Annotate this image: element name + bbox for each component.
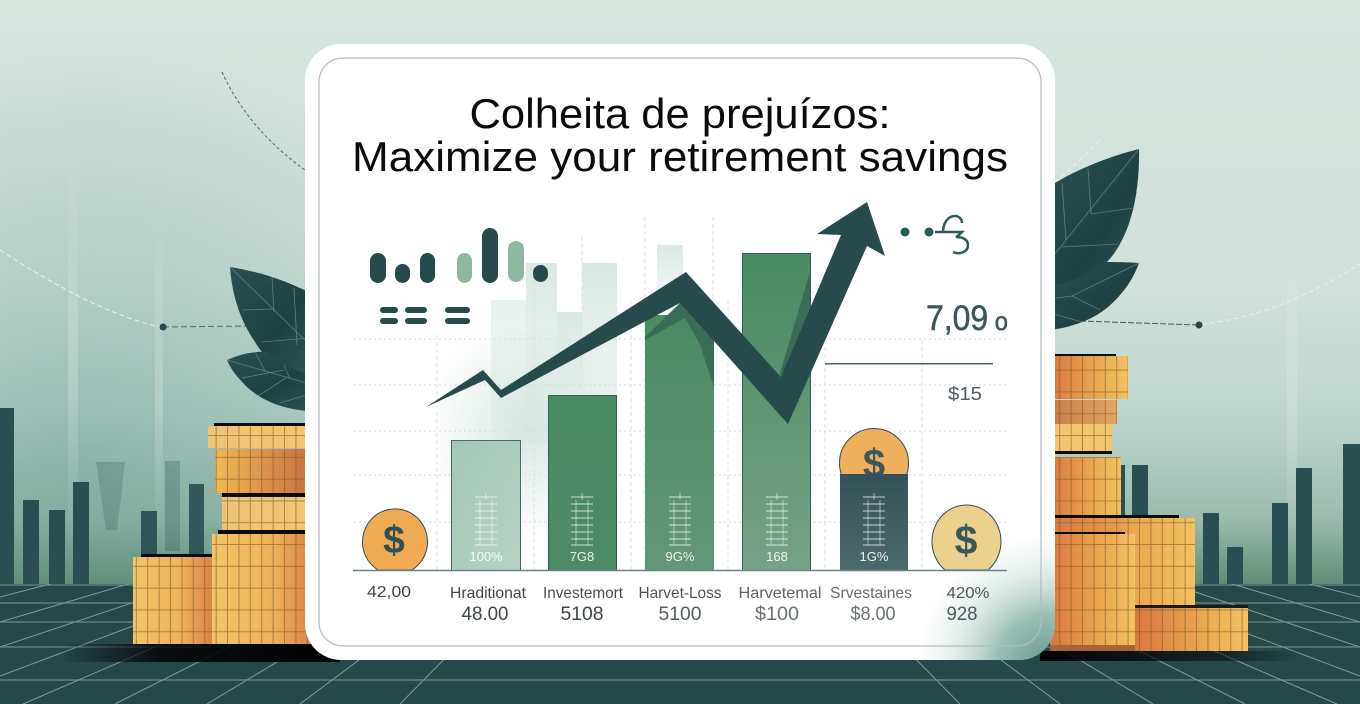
dashed connector lines	[0, 72, 1360, 327]
coin right: $	[955, 517, 978, 563]
category labels	[367, 584, 990, 602]
value labels: 5108	[560, 604, 604, 625]
bar value labels: 1G%	[860, 549, 889, 564]
shadows under coin stacks	[60, 644, 1300, 662]
category labels: Hraditionat	[450, 585, 527, 602]
bar value labels	[469, 493, 889, 564]
coin stack left	[133, 423, 312, 644]
coin left	[362, 509, 428, 570]
value labels	[462, 604, 978, 625]
category labels: Harvetemal	[738, 585, 822, 602]
chart	[353, 202, 1007, 625]
mini pill chart	[370, 228, 548, 283]
mini legend dashes	[380, 307, 470, 324]
value labels: $100	[755, 604, 799, 625]
side divider	[825, 363, 993, 364]
bar: dark savings	[840, 474, 908, 570]
card panel	[305, 44, 1055, 660]
category labels: Investemort	[543, 585, 624, 602]
connector node right	[1196, 322, 1202, 328]
bar: harvest total	[742, 254, 810, 570]
coin behind dark bar	[839, 428, 909, 474]
background skyline bars right	[1120, 444, 1360, 584]
value labels: $8.00	[850, 604, 896, 625]
value labels: 48.00	[462, 604, 508, 625]
category labels: 42,00	[367, 584, 411, 601]
floor grid	[0, 584, 1360, 704]
coin left: $	[383, 519, 405, 562]
background skyline bars left	[0, 408, 204, 584]
leaves right	[1050, 149, 1139, 330]
bar value labels: 9G%	[666, 549, 695, 564]
category labels: 420%	[946, 585, 990, 602]
value labels: 5100	[658, 604, 702, 625]
leaves left	[227, 267, 310, 411]
baseline	[353, 570, 1007, 572]
title: Maximize your retirement savings	[352, 133, 1008, 180]
bar: harvest-loss	[645, 315, 714, 570]
connector node left	[160, 324, 166, 330]
coin stack right	[1050, 354, 1248, 651]
bar value labels: 100%	[469, 549, 503, 564]
value labels: 928	[946, 604, 978, 625]
bar value labels: 7G8	[570, 549, 594, 564]
bar: traditional	[452, 440, 520, 570]
side value: $15	[948, 384, 982, 404]
growth arrow	[426, 202, 885, 424]
title: Colheita de prejuízos:	[470, 90, 890, 137]
ghost background bars	[440, 245, 683, 540]
coin right	[932, 505, 1001, 570]
bar value labels: 168	[766, 549, 788, 564]
bar: investment	[548, 396, 616, 570]
side figure: 7,09 o	[926, 299, 1008, 338]
title	[352, 90, 1008, 180]
coin behind dark bar: $	[863, 442, 885, 486]
arrow shade on bars	[645, 272, 810, 400]
category labels: Srvestaines	[830, 585, 912, 602]
category labels: Harvet-Loss	[638, 585, 722, 602]
icon: dots and squiggle	[900, 216, 968, 253]
